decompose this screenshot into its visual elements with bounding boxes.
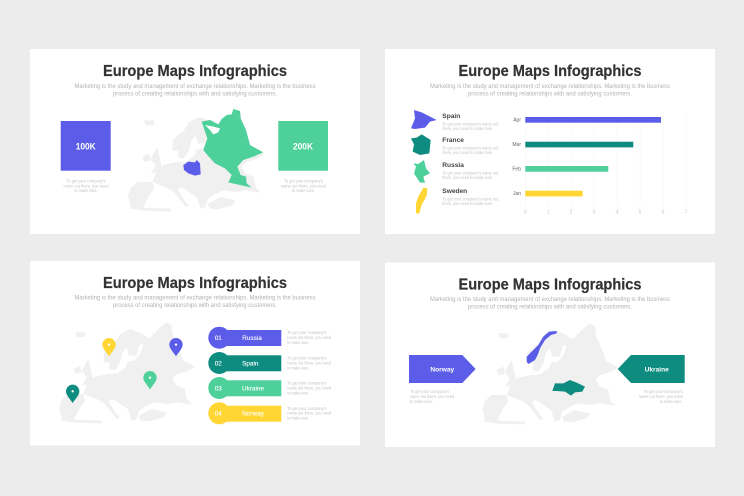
icon: France [411, 134, 431, 155]
country: Norway [527, 331, 557, 364]
list item 03 Ukraine [208, 377, 332, 399]
list item 03 Ukraine: 03 [215, 385, 222, 392]
caption right [281, 178, 326, 193]
stat box: 100K: 100K [76, 142, 96, 152]
caption left: to make sure. [410, 399, 433, 404]
map of Europe [59, 322, 195, 423]
axis labels: 6 [662, 210, 665, 216]
caption left [410, 389, 454, 404]
list item 02 Spain: name out there, you need [287, 360, 332, 365]
panel: country list and bar chart [385, 49, 715, 234]
list item 04 Norway [208, 402, 332, 424]
bar: Mar: Mar [512, 142, 521, 148]
map highlights: Russia and Poland [183, 109, 263, 188]
axis labels: 0 [524, 210, 527, 216]
bar: Feb: Feb [512, 166, 521, 172]
axis labels: 4 [616, 210, 619, 216]
caption right: name out there, you need [639, 394, 683, 399]
list item 02 Spain [208, 352, 332, 374]
callout arrow: Ukraine: Ukraine [645, 366, 669, 373]
axis labels: 7 [685, 210, 688, 216]
label: Spain: Spain [442, 113, 460, 120]
title: Europe Maps Infographics [458, 63, 642, 80]
bar: Feb [512, 166, 608, 172]
list item 04 Norway: to make sure. [287, 416, 309, 421]
label: Russia [442, 162, 499, 180]
stat box: 200K [278, 121, 328, 171]
label: Spain: To get your company's name out [442, 121, 499, 126]
caption right: name out there, you need [281, 183, 326, 188]
panel: Poland and Russia comparison [30, 49, 360, 234]
label: Spain: there, you need to make sure. [442, 126, 493, 131]
stat box: 200K: 200K [293, 142, 313, 152]
description [430, 83, 670, 98]
description: process of creating relationships with and satisfying customers. [113, 90, 277, 98]
caption left: to make sure. [74, 188, 98, 193]
axis labels: 5 [639, 210, 642, 216]
map of Europe [128, 110, 264, 211]
pin: green [143, 371, 157, 389]
pin: teal [66, 385, 79, 403]
label: Russia: To get your company's name out [442, 170, 499, 175]
label: Sweden: Sweden [442, 188, 467, 195]
description: Marketing is the study and management of exchange relationships. Marketing is the business [74, 83, 316, 90]
axis labels [524, 210, 688, 216]
label: France: To get your company's name out [442, 145, 499, 150]
pin: yellow [102, 338, 116, 356]
panel: pins and numbered list [30, 261, 360, 446]
description: process of creating relationships with and satisfying customers. [113, 302, 277, 309]
description: Marketing is the study and management of exchange relationships. Marketing is the business [430, 83, 670, 90]
list item 03 Ukraine: To get your company's [287, 380, 327, 386]
icon: Spain [411, 110, 437, 129]
stat box: 100K [61, 121, 111, 171]
list item 03 Ukraine: name out there, you need [287, 385, 332, 390]
caption right [639, 389, 683, 404]
list item 01 Russia: To get your company's [287, 330, 327, 335]
axis labels: 2 [570, 210, 573, 216]
label: Russia: Russia [442, 162, 464, 169]
description [74, 83, 316, 98]
label: France [442, 137, 499, 155]
list item 01 Russia: to make sure. [287, 340, 309, 345]
caption right: To get your company's [284, 178, 324, 184]
list item 02 Spain: 02 [215, 360, 222, 367]
map of Europe with Norway and Ukraine highlighted [482, 323, 618, 424]
list item 01 Russia: 01 [215, 335, 222, 342]
caption left [64, 178, 109, 193]
map pins [66, 338, 183, 403]
title: Europe Maps Infographics [458, 276, 642, 294]
country: Poland [183, 160, 201, 176]
description: process of creating relationships with and satisfying customers. [468, 304, 632, 311]
bar: Jan: Jan [513, 191, 521, 197]
list item 04 Norway: To get your company's [287, 406, 327, 411]
description [74, 295, 316, 309]
bar: Jan [513, 191, 583, 197]
list item 01 Russia: Russia [242, 335, 262, 342]
panel: Norway and Ukraine [385, 262, 715, 447]
label: France: France [442, 137, 464, 144]
country: Ukraine [552, 380, 585, 396]
bar chart [512, 113, 688, 216]
list item 01 Russia [208, 327, 332, 349]
description: Marketing is the study and management of exchange relationships. Marketing is the business [74, 295, 316, 302]
bar: Apr: Apr [513, 118, 521, 124]
caption left: name out there, you need [410, 394, 454, 399]
label: France: there, you need to make sure. [442, 150, 493, 155]
label: Sweden: there, you need to make sure. [442, 201, 493, 206]
icon: Russia [413, 160, 430, 183]
list item 04 Norway: 04 [215, 411, 222, 418]
caption right: To get your company's [644, 389, 683, 394]
description: process of creating relationships with and satisfying customers. [468, 90, 632, 98]
caption left: To get your company's [410, 389, 450, 394]
list item 03 Ukraine: Ukraine [242, 385, 264, 392]
icon: Sweden [416, 188, 427, 213]
list item 04 Norway: name out there, you need [287, 411, 332, 416]
axis labels: 1 [547, 210, 550, 216]
caption right: to make sure. [292, 188, 315, 193]
description [430, 296, 670, 311]
label: Sweden [442, 188, 499, 206]
caption left: name out there, you need [64, 183, 109, 188]
title: Europe Maps Infographics [103, 63, 287, 80]
list item 02 Spain: Spain [242, 360, 259, 367]
callout arrow: Norway [409, 355, 476, 383]
label: Sweden: To get your company's name out [442, 196, 499, 201]
pin: blue [169, 338, 183, 356]
caption left: To get your company's [66, 178, 106, 184]
country: Russia [202, 109, 263, 188]
label: Spain [442, 113, 499, 131]
list item 01 Russia: name out there, you need [287, 335, 332, 340]
axis labels: 3 [593, 210, 596, 216]
bar: Mar [512, 142, 633, 148]
caption right: to make sure. [660, 399, 683, 404]
callout arrow: Norway: Norway [430, 366, 455, 373]
description: Marketing is the study and management of exchange relationships. Marketing is the business [430, 296, 670, 303]
list item 02 Spain: To get your company's [287, 356, 327, 360]
list item 02 Spain: to make sure. [287, 365, 309, 370]
list item 03 Ukraine: to make sure. [287, 390, 309, 395]
title: Europe Maps Infographics [103, 275, 287, 292]
callout arrow: Ukraine [618, 355, 685, 383]
bar: Apr [513, 117, 661, 124]
label: Russia: there, you need to make sure. [442, 175, 493, 180]
list item 04 Norway: Norway [242, 411, 265, 418]
